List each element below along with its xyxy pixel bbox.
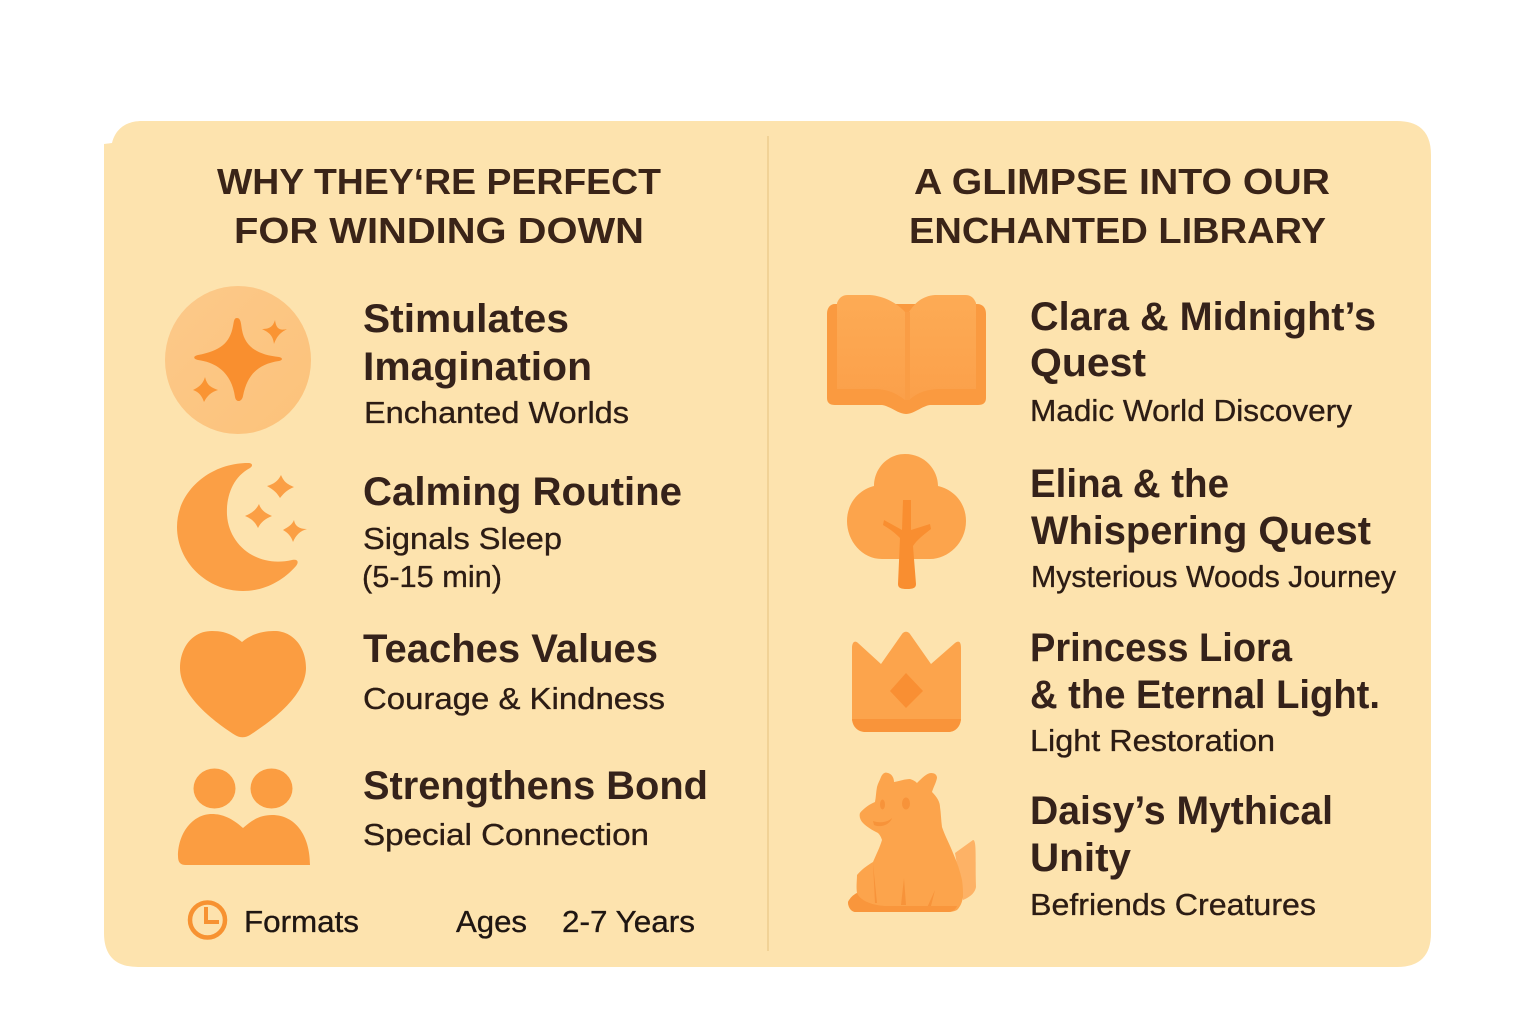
panel: benefits list bbox=[165, 286, 708, 865]
panel: background card bbox=[104, 121, 1431, 967]
text: daisy's mythical unity: Befriends Creatures bbox=[1030, 887, 1316, 922]
heading: why they're perfect bbox=[217, 161, 661, 251]
text: daisy's mythical unity: Daisy’s Mythical bbox=[1030, 789, 1333, 833]
text: clara and midnight's quest: Clara & Midnight’s bbox=[1030, 295, 1376, 339]
icon: open book bbox=[827, 295, 986, 414]
text: princess liora: Light Restoration bbox=[1030, 723, 1275, 758]
text: stimulates imagination bbox=[363, 297, 629, 430]
text: princess liora bbox=[1030, 626, 1380, 758]
heading: enchanted library: ENCHANTED LIBRARY bbox=[909, 210, 1326, 251]
text: daisy's mythical unity bbox=[1030, 789, 1333, 922]
icon: heart bbox=[180, 631, 306, 737]
text: strengthens bond: Strengthens Bond bbox=[363, 764, 708, 808]
text: elina and the whispering quest: Whispering Quest bbox=[1031, 509, 1371, 553]
text: clara and midnight's quest: Madic World Discovery bbox=[1030, 393, 1353, 428]
text: calming routine: Calming Routine bbox=[363, 470, 682, 514]
text: daisy's mythical unity: Unity bbox=[1030, 836, 1132, 880]
panel: library list bbox=[827, 295, 1396, 922]
text: elina and the whispering quest: Mysterious Woods Journey bbox=[1031, 559, 1396, 594]
text: teaches values: Courage & Kindness bbox=[363, 681, 665, 716]
icon: crown bbox=[852, 632, 961, 732]
text: stimulates imagination: Imagination bbox=[363, 345, 592, 389]
text: teaches values bbox=[363, 627, 665, 716]
icon: tree bbox=[847, 454, 966, 589]
text: calming routine: (5-15 min) bbox=[362, 559, 502, 594]
text: stimulates imagination: Enchanted Worlds bbox=[364, 395, 629, 430]
heading: enchanted library bbox=[909, 161, 1330, 251]
text: ages: Ages bbox=[456, 904, 527, 939]
heading: enchanted library: A GLIMPSE INTO OUR bbox=[914, 161, 1330, 202]
text: strengthens bond: Special Connection bbox=[363, 817, 649, 852]
text: formats: Formats bbox=[244, 904, 359, 939]
icon: two people bbox=[178, 768, 310, 865]
text: calming routine bbox=[362, 470, 682, 594]
text: clara and midnight's quest bbox=[1030, 295, 1376, 428]
text: calming routine: Signals Sleep bbox=[363, 521, 562, 556]
icon: clock bbox=[190, 902, 225, 938]
text: clara and midnight's quest: Quest bbox=[1030, 341, 1146, 385]
icon: sparkles in circle bbox=[165, 286, 311, 434]
text: princess liora: & the Eternal Light. bbox=[1030, 673, 1380, 717]
heading: why they're perfect: FOR WINDING DOWN bbox=[234, 210, 644, 251]
footer: formats and ages bbox=[190, 902, 695, 939]
heading: why they're perfect: WHY THEY‘RE PERFECT bbox=[217, 161, 661, 202]
text: strengthens bond bbox=[363, 764, 708, 852]
text: elina and the whispering quest bbox=[1030, 462, 1396, 594]
text: teaches values: Teaches Values bbox=[363, 627, 658, 671]
icon: fox creature bbox=[848, 773, 976, 912]
text: elina and the whispering quest: Elina & the bbox=[1030, 462, 1229, 506]
text: age range: 2-7 Years bbox=[562, 904, 695, 939]
text: princess liora: Princess Liora bbox=[1030, 626, 1293, 670]
text: stimulates imagination: Stimulates bbox=[363, 297, 569, 341]
icon: moon and stars bbox=[177, 463, 307, 591]
